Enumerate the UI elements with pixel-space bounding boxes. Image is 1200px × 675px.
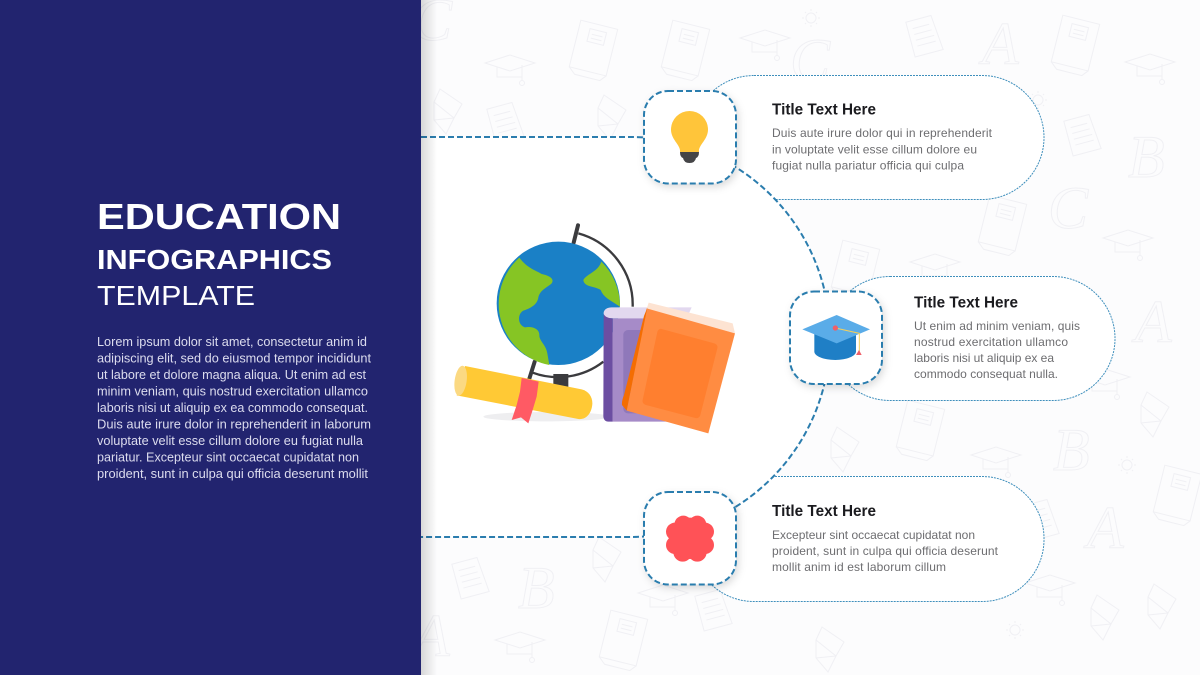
intro paragraph: pariatur. Excepteur sint occaecat cupidatat non [97,450,359,464]
background pattern of school doodles: B [1053,417,1090,483]
central illustration: globe, scroll and books [453,225,735,433]
white semicircle stage [421,137,830,537]
card 1 text: fugiat nulla pariatur officia qui culpa [772,158,964,172]
card 2 text: nostrud exercitation ullamco [914,335,1068,349]
card 1 text: Title Text Here [772,102,876,118]
card 3 pill outline [692,476,1044,602]
icon box 2: graduation cap [790,292,882,384]
intro paragraph: proident, sunt in culpa qui officia deserunt mollit [97,467,369,481]
card 1 text [772,102,993,172]
card 3 text [772,503,999,574]
card 3 text: Title Text Here [772,503,876,520]
intro paragraph: Duis aute irure dolor in reprehenderit in laborum [97,418,371,432]
card 3 text: mollit anim id est laborum cillum [772,560,946,574]
card 2 text: laboris nisi ut aliquip ex ea [914,351,1054,365]
purple book [603,307,692,422]
icon: light bulb [671,111,708,163]
background pattern of school doodles: A [1131,289,1172,355]
background pattern of school doodles: C [790,27,831,93]
background pattern of school doodles: C [1048,175,1089,241]
title: template: TEMPLATE [97,280,255,311]
intro paragraph: laboris nisi ut aliquip ex ea commodo consequat. [97,401,368,415]
card 3 text: proident, sunt in culpa qui officia deserunt [772,544,999,558]
card 1 text: Duis aute irure dolor qui in reprehenderit [772,126,993,140]
background pattern of school doodles: A [1083,495,1124,561]
icon: brain [666,516,714,562]
dashed connector arc with horizontal leaders [421,137,830,537]
card 2 text: Ut enim ad minim veniam, quis [914,319,1080,333]
background pattern of school doodles: A [409,603,450,669]
card 2 text: commodo consequat nulla. [914,367,1058,381]
left title panel [0,0,421,675]
card 1 pill outline [692,76,1044,200]
icon: graduation cap [802,315,870,360]
ribbon [512,378,539,423]
title: education: EDUCATION [97,196,341,237]
ground shadow [483,412,610,421]
intro paragraph: Lorem ipsum dolor sit amet, consectetur anim id [97,335,367,349]
background pattern of school doodles: B [1128,124,1165,190]
icon box 1: light bulb [644,91,736,184]
background pattern of school doodles: A [978,11,1019,77]
globe [497,242,620,365]
orange book [622,303,735,433]
title: infographics: INFOGRAPHICS [97,244,332,275]
panel edge shadow [421,0,437,675]
background pattern of school doodles [409,0,1200,675]
card 2 text [914,294,1080,381]
intro paragraph: voluptate velit esse cillum dolore eu fugiat nulla [97,434,363,448]
background pattern of school doodles: B [518,555,555,621]
intro paragraph: minim veniam, quis nostrud exercitation ullamco [97,384,368,398]
intro paragraph: ut labore et dolore magna aliqua. Ut enim ad est [97,368,367,382]
card 3 text: Excepteur sint occaecat cupidatat non [772,528,975,542]
intro paragraph [97,335,372,481]
icon box 3: brain [644,492,736,584]
card 1 text: in voluptate velit esse cillum dolore eu [772,142,977,156]
card 2 pill outline [828,276,1115,400]
diploma scroll [453,365,592,423]
card 2 text: Title Text Here [914,294,1018,312]
intro paragraph: adipiscing elit, sed do eiusmod tempor incididunt [97,352,372,366]
globe stand [529,225,633,387]
